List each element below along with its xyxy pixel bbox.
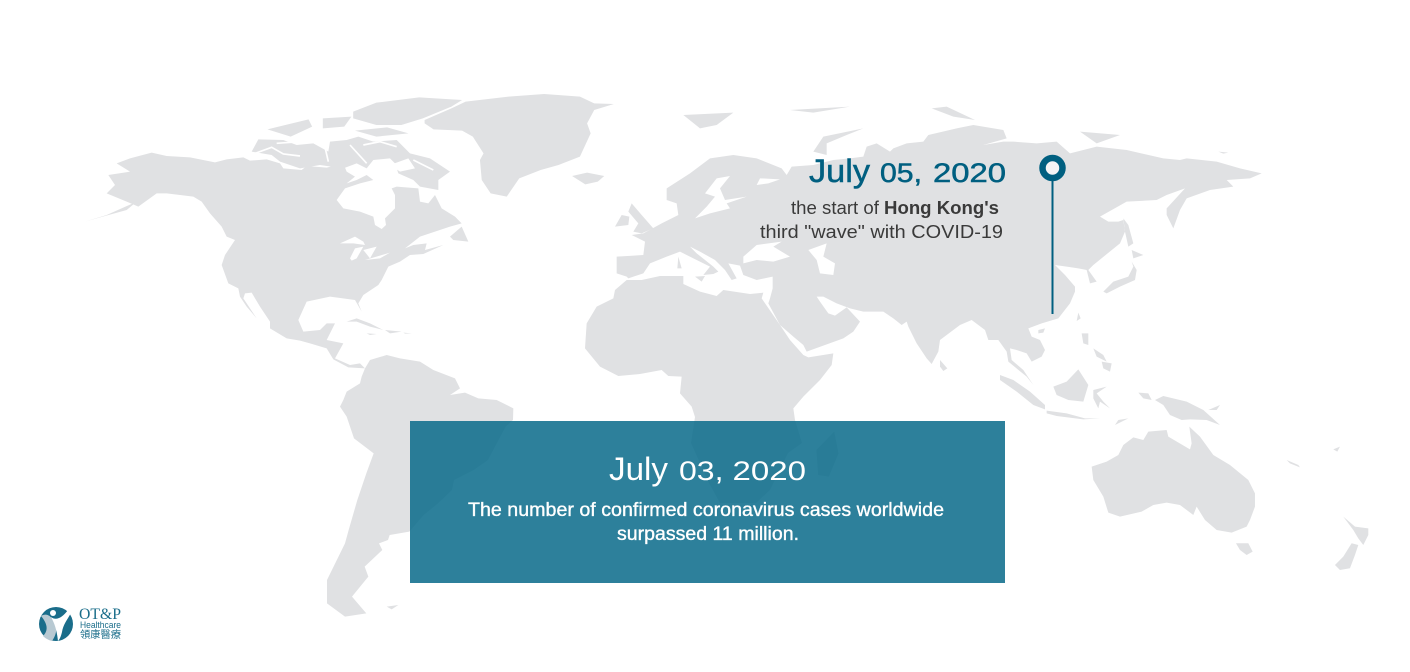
icon: logo emblem — [39, 607, 73, 641]
text block: third wave: the start of Hong Kong's — [791, 197, 999, 218]
British Isles — [615, 203, 653, 233]
callout: July 05 Hong Kong — [760, 153, 1006, 242]
heading: July 03, 2020: 2020 — [732, 456, 806, 486]
North America — [85, 137, 468, 368]
Eurasia — [615, 107, 1262, 385]
Madagascar — [816, 432, 839, 477]
text block: cases surpassed 11 million: surpassed 11 million. — [617, 524, 799, 545]
text block: cases surpassed 11 million: The number of confirmed coronavirus cases worldwide — [468, 500, 944, 521]
icon: map pin on Hong Kong — [1042, 158, 1062, 314]
South America and Caribbean — [327, 318, 513, 617]
wordmark: OT&P — [79, 606, 121, 623]
Mediterranean islands — [677, 257, 705, 282]
Southeast Asia and Oceania — [1000, 333, 1368, 570]
heading: July 05, 2020: July — [809, 153, 870, 189]
logo: OT&P Healthcare — [39, 606, 121, 641]
Great Lakes and Arctic channels — [253, 140, 433, 261]
panel: July 03 callout — [410, 421, 1005, 583]
Central America and Arctic islands — [267, 97, 462, 137]
Greenland and Iceland — [425, 94, 614, 197]
wordmark: 領康醫療 — [80, 628, 121, 641]
world map — [85, 94, 1368, 617]
text block: third wave — [760, 197, 1003, 242]
heading: July 05, 2020: 05, — [880, 158, 922, 188]
text block: third wave: third "wave" with COVID-19 — [760, 221, 1003, 242]
Pacific coast islands — [1103, 218, 1143, 293]
wordmark — [79, 606, 121, 641]
wordmark: Healthcare — [80, 620, 121, 630]
South Asia islands — [940, 313, 1081, 371]
heading: July 03, 2020: 03, — [679, 456, 724, 486]
Arctic islands — [683, 107, 1228, 155]
heading: July 03, 2020: July — [609, 451, 668, 487]
text block: cases surpassed 11 million — [468, 500, 944, 545]
inland seas — [695, 176, 835, 275]
heading: July 05, 2020: 2020 — [933, 158, 1006, 188]
Africa — [585, 276, 833, 503]
